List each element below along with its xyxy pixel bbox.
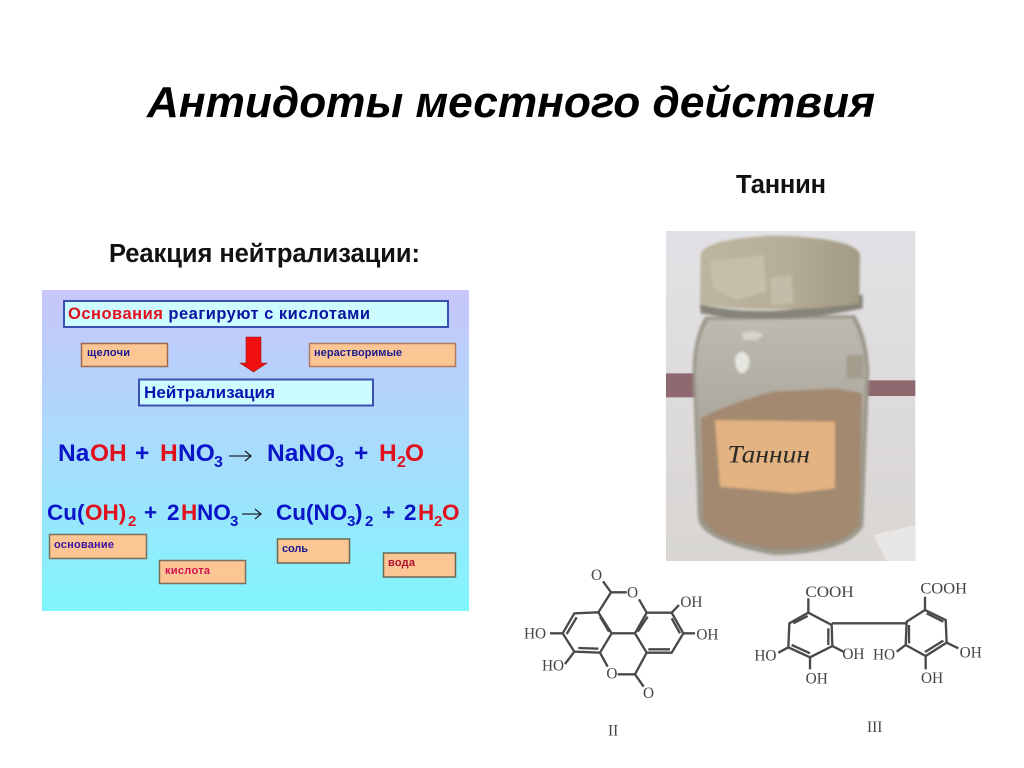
chemical structure: ellagic acid (II): HO [542, 658, 564, 675]
equation: NaOH + HNO3: Na [58, 440, 90, 467]
title: Антидоты местного действия [146, 78, 875, 127]
equation: Cu(OH)2 + 2HNO3: 3 [230, 513, 238, 530]
equation: Cu(OH)2 + 2HNO3: + [382, 500, 395, 525]
equation: Cu(OH)2 + 2HNO3: 2 [404, 500, 417, 525]
equation: Cu(OH)2 + 2HNO3: OH) [85, 500, 126, 525]
equation: Cu(OH)2 + 2HNO3: 2 [434, 513, 442, 530]
chemical structure: hexahydroxydiphenic acid (III): HO [873, 647, 895, 664]
arrow: reaction 1 [229, 451, 251, 461]
arrow: reaction 2 [242, 509, 261, 519]
equation: NaOH + HNO3: 3 [335, 454, 344, 471]
chemical structure: hexahydroxydiphenic acid (III): COOH [805, 584, 854, 601]
chemical structure: ellagic acid (II): OH [680, 594, 702, 611]
equation: NaOH + HNO3: + [354, 440, 368, 467]
chemical structure: ellagic acid (II): O [591, 567, 602, 584]
panel: neutralization diagram [42, 290, 469, 611]
box: neutralization: Нейтрализация [144, 383, 275, 402]
heading: tannin: Таннин [736, 171, 826, 199]
equation: NaOH + HNO3: NO [178, 440, 215, 467]
photo: tannin jar [666, 231, 915, 561]
tag: salt [278, 539, 350, 563]
box: neutralization [139, 380, 373, 406]
tag: insoluble: нерастворимые [314, 347, 402, 359]
chemical structure: ellagic acid (II) [524, 567, 718, 739]
equation: Cu(OH)2 + 2HNO3: 2 [365, 513, 373, 530]
chemical structure: hexahydroxydiphenic acid (III): OH [806, 671, 828, 688]
chemical structure: hexahydroxydiphenic acid (III): III [867, 719, 882, 736]
tag: alkalis: щелочи [87, 347, 130, 359]
chemical structure: ellagic acid (II): II [608, 722, 618, 739]
equation: Cu(OH)2 + 2HNO3: 3 [347, 513, 355, 530]
box: bases react with acids [64, 301, 448, 327]
equation: Cu(OH)2 + 2HNO3: H [418, 500, 434, 525]
chemical structure: hexahydroxydiphenic acid (III) [754, 581, 982, 736]
equation: NaOH + HNO3: H [379, 440, 397, 467]
chemical structure: hexahydroxydiphenic acid (III): OH [842, 646, 864, 663]
tag: base: основание [54, 539, 114, 551]
tag: insoluble [310, 344, 456, 366]
equation: Cu(OH)2 + 2HNO3: 2 [167, 500, 180, 525]
tag: water: вода [388, 557, 416, 569]
chemical structure: ellagic acid (II): O [643, 685, 654, 702]
heading: neutralization reaction: Реакция нейтрализации: [109, 240, 420, 268]
chemical structure: hexahydroxydiphenic acid (III): OH [921, 670, 943, 687]
equation: Cu(OH)2 + 2HNO3: ) [355, 500, 362, 525]
equation: NaOH + HNO3: NaNO [267, 440, 335, 467]
equation: NaOH + HNO3: H [160, 440, 178, 467]
chemical structure: ellagic acid (II): HO [524, 626, 546, 643]
equation: Cu(OH)2 + 2HNO3: 2 [128, 513, 136, 530]
chemical structure: hexahydroxydiphenic acid (III): HO [754, 647, 776, 664]
tag: base [50, 534, 146, 558]
equation: Cu(OH)2 + 2HNO3: Cu( [47, 500, 85, 525]
label handwriting: Таннин [727, 440, 810, 468]
equation: NaOH + HNO3: 2 [397, 454, 406, 471]
tag: acid [160, 560, 246, 584]
equation: NaOH + HNO3: O [405, 440, 424, 467]
chemical structure: ellagic acid (II): O [606, 665, 617, 682]
equation: Cu(OH)2 + 2HNO3: H [181, 500, 197, 525]
tag: acid: кислота [165, 565, 211, 577]
equation: NaOH + HNO3: 3 [214, 454, 223, 471]
tag: salt: соль [282, 543, 308, 555]
tag: alkalis [82, 344, 168, 366]
box: bases react with acids: Основания реагируют с кислотами [68, 305, 370, 323]
arrow: down [240, 337, 267, 372]
chemical structure: hexahydroxydiphenic acid (III): COOH [920, 581, 967, 598]
equation: NaOH + HNO3: + [135, 440, 149, 467]
chemical structure: ellagic acid (II): O [627, 585, 638, 602]
equation: Cu(OH)2 + 2HNO3: NO [197, 500, 231, 525]
equation: Cu(OH)2 + 2HNO3: O [442, 500, 460, 525]
equation: Cu(OH)2 + 2HNO3: Cu(NO [276, 500, 347, 525]
equation: Cu(OH)2 + 2HNO3: + [144, 500, 157, 525]
equation: NaOH + HNO3: OH [90, 440, 127, 467]
chemical structure: ellagic acid (II): OH [696, 626, 718, 643]
tag: water [384, 553, 456, 577]
chemical structure: hexahydroxydiphenic acid (III): OH [960, 645, 982, 662]
